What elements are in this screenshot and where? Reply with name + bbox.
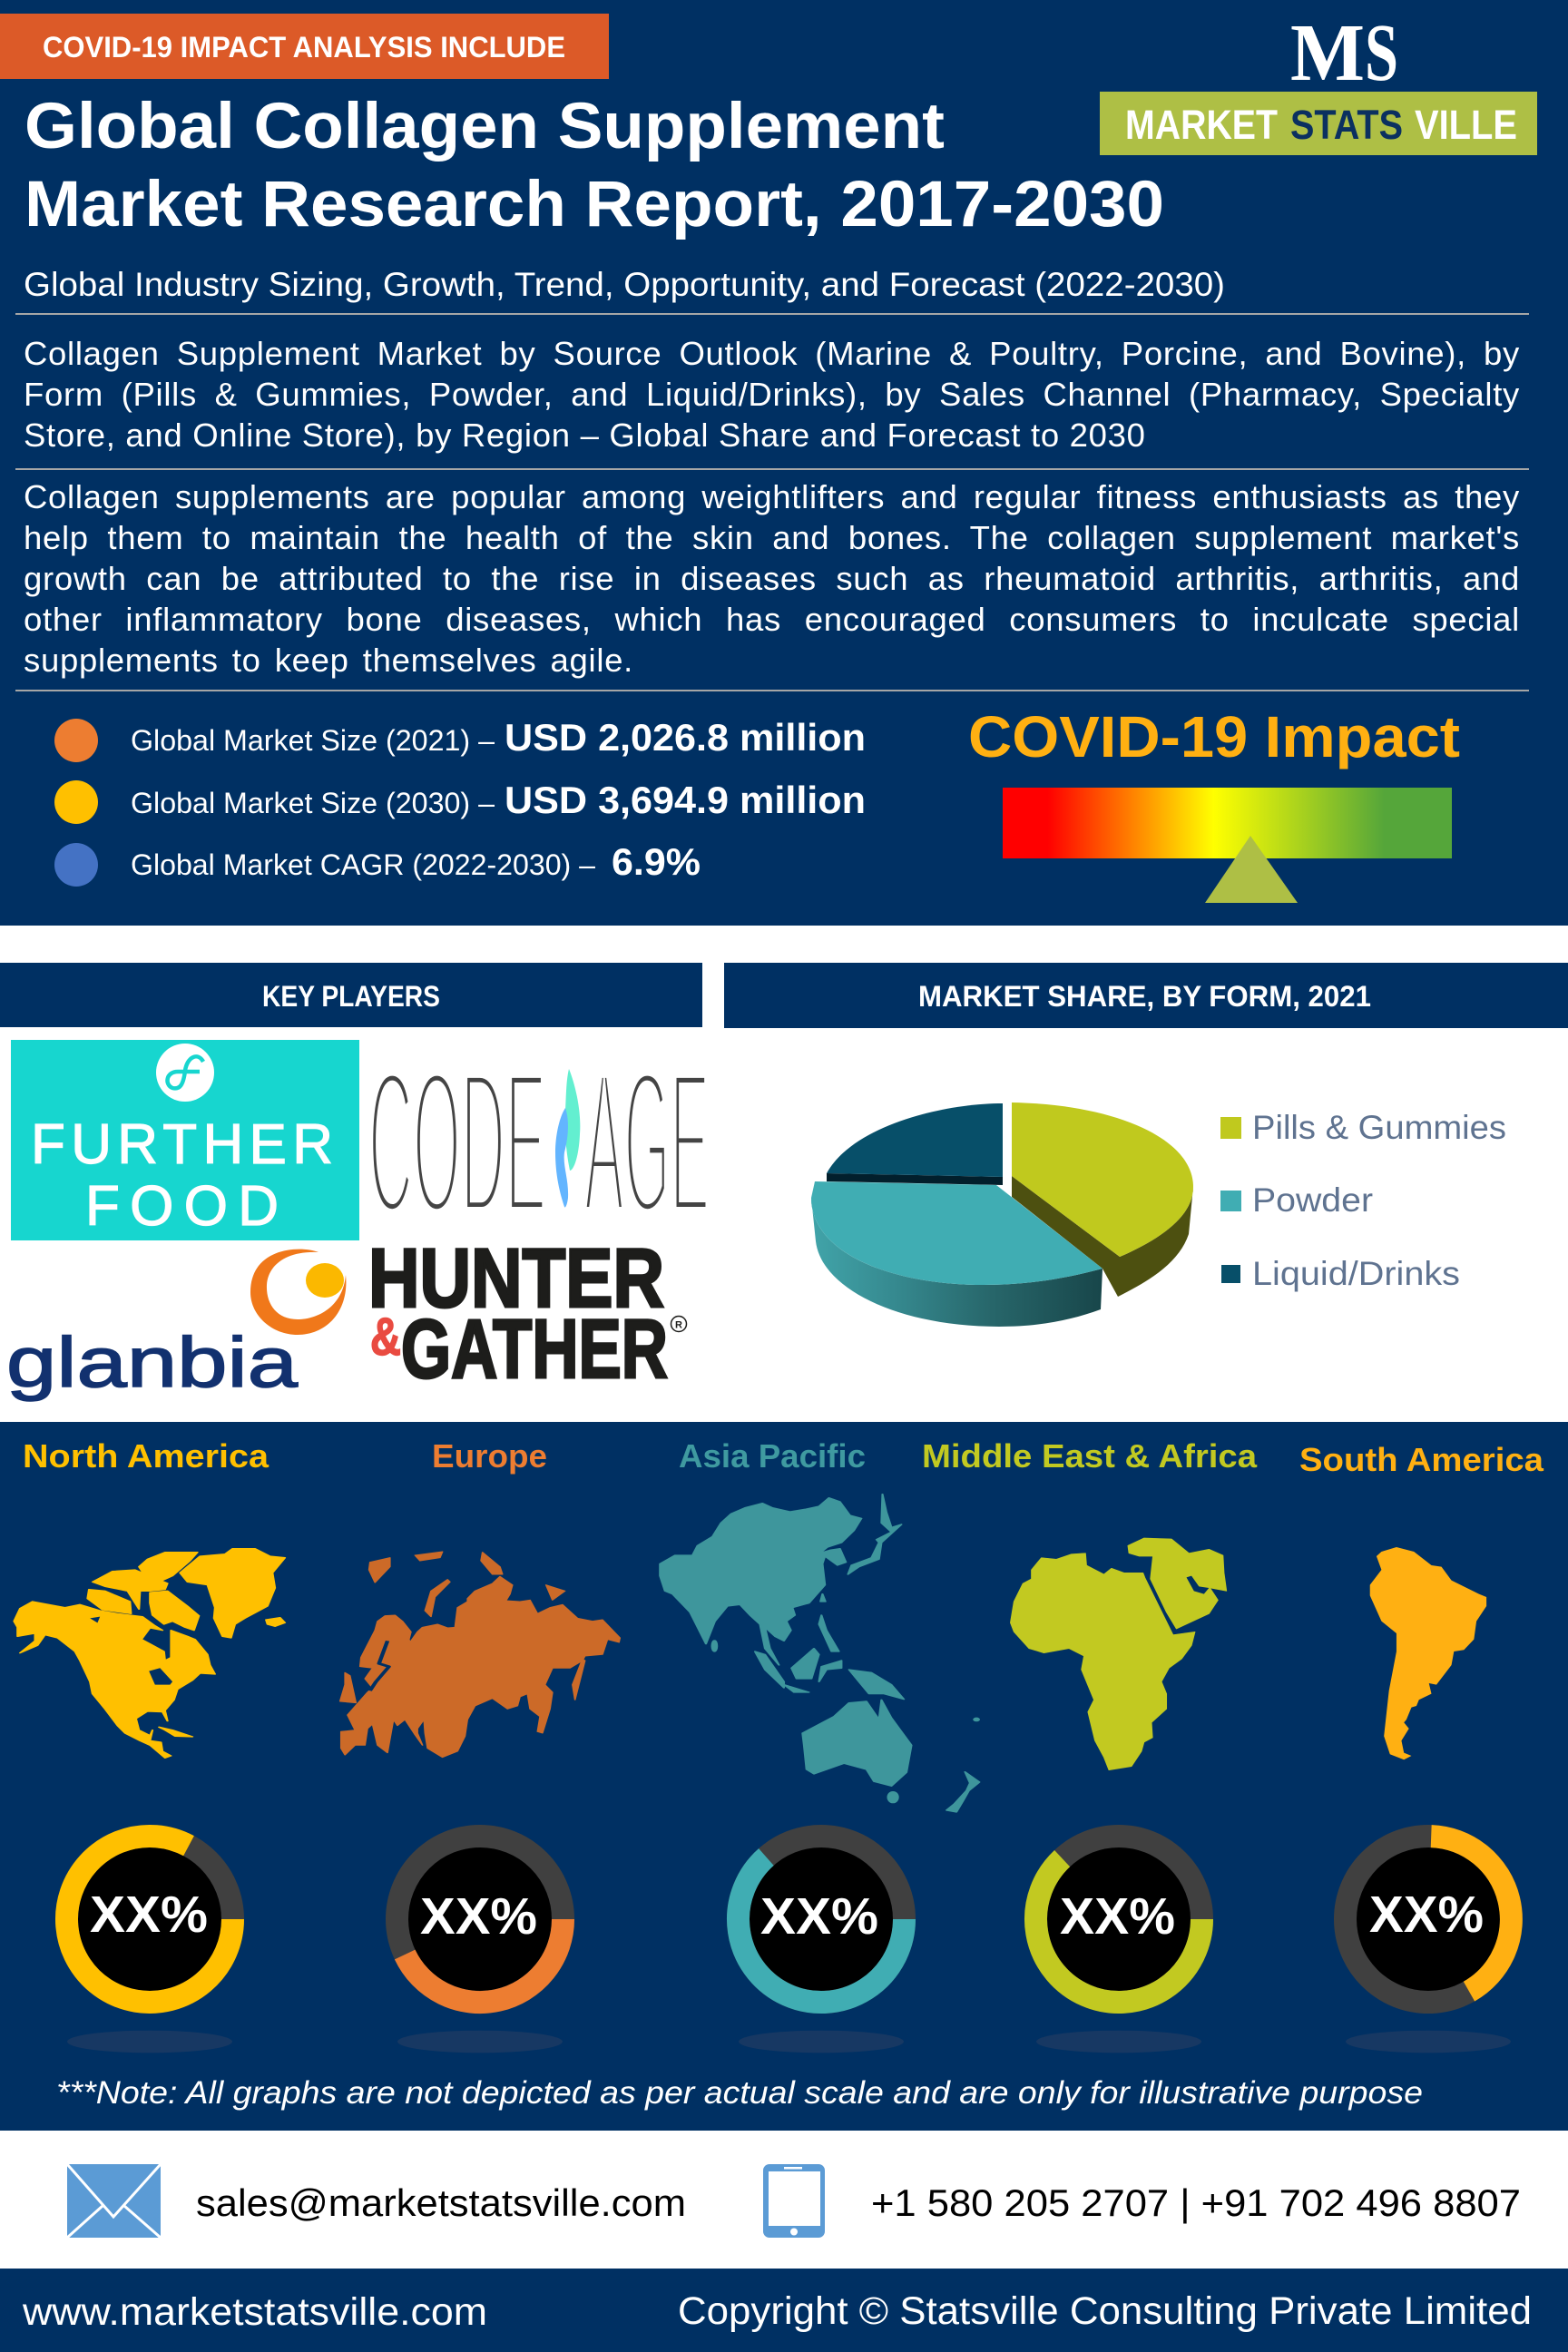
donut: south america <box>1345 1837 1512 2053</box>
stat: market CAGR: 6.9% <box>612 840 701 883</box>
regions navy panel <box>0 1422 1568 2131</box>
text block: market overview: growth can be attributed to the rise in diseases such as rheumatoid arthritis, arthritis, and <box>24 560 1520 597</box>
footer navy panel <box>0 2269 1568 2352</box>
covid-19 impact gauge: COVID-19 Impact <box>968 704 1460 769</box>
logo: hunter and gather <box>368 1232 686 1396</box>
stat: market size 2021: USD 2,026.8 million <box>505 716 866 759</box>
donut: north america: XX% <box>90 1886 208 1944</box>
logo: hunter and gather: R <box>675 1319 682 1330</box>
logo: glanbia: glanbia <box>6 1322 299 1402</box>
logo: further food <box>11 1040 359 1240</box>
logo: market stats ville: S <box>1365 8 1398 98</box>
title <box>24 91 1164 240</box>
pie chart: market share by form <box>811 1102 1193 1327</box>
region headings: North America <box>23 1437 270 1475</box>
logo: market stats ville: VILLE <box>1415 102 1517 148</box>
logo: hunter and gather: & <box>370 1308 401 1367</box>
stat: market size 2030: Global Market Size (2030) – <box>131 787 495 819</box>
logo: further food: FOOD <box>85 1175 283 1238</box>
donut: middle east and africa <box>1036 1837 1201 2053</box>
map: middle east and africa <box>1011 1538 1227 1770</box>
text block: report scope: Form (Pills & Gummies, Powder, and Liquid/Drinks), by Sales Channel (Pharmacy, Specialty <box>24 376 1520 413</box>
logo: market stats ville: STATS <box>1290 102 1403 148</box>
banner: covid-19 impact analysis <box>0 14 609 79</box>
text block: market overview: Collagen supplements are popular among weightlifters and regular fitness enthusiasts as they <box>24 478 1520 515</box>
donut: north america <box>67 1836 232 2053</box>
icon: email envelope <box>67 2164 161 2238</box>
region headings <box>23 1437 1544 1478</box>
logo: codeage: CODE <box>368 1029 546 1256</box>
logo: glanbia <box>6 1250 346 1402</box>
text block: report scope: Collagen Supplement Market by Source Outlook (Marine & Poultry, Porcine, and Bovine), by <box>24 335 1520 372</box>
donut: middle east and africa: XX% <box>1060 1887 1175 1945</box>
stat: market CAGR <box>54 840 701 887</box>
map: south america <box>1370 1547 1486 1759</box>
donut: south america: XX% <box>1369 1886 1484 1944</box>
text block: market overview <box>24 478 1520 679</box>
heading: market share by form: MARKET SHARE, BY FORM, 2021 <box>918 980 1371 1013</box>
region headings: Middle East & Africa <box>922 1437 1258 1475</box>
subtitle: Global Industry Sizing, Growth, Trend, Opportunity, and Forecast (2022-2030) <box>24 266 1225 303</box>
contact phone numbers: +1 580 205 2707 | +91 702 496 8807 <box>871 2181 1521 2224</box>
pie legend: Liquid/Drinks <box>1252 1255 1460 1292</box>
pie legend: Pills & Gummies <box>1252 1109 1506 1146</box>
heading: key players <box>0 963 702 1027</box>
text block: report scope: Store, and Online Store), by Region – Global Share and Forecast to 2030 <box>24 416 1146 454</box>
title: Market Research Report, 2017-2030 <box>24 169 1164 240</box>
slice: powder <box>811 1181 1102 1327</box>
logo: market stats ville: MARKET <box>1125 102 1278 148</box>
slice: liquid/drinks <box>827 1103 1003 1185</box>
map: asia pacific <box>660 1494 979 1812</box>
market stats list <box>54 716 866 887</box>
heading: key players: KEY PLAYERS <box>262 980 440 1013</box>
logo: hunter and gather: GATHER <box>401 1303 668 1396</box>
contact email: sales@marketstatsville.com <box>196 2181 686 2224</box>
stat: market size 2021 <box>54 716 866 762</box>
pie legend <box>1220 1109 1506 1292</box>
covid-19 impact gauge <box>968 704 1460 903</box>
footer copyright: Copyright © Statsville Consulting Private Limited <box>678 2289 1532 2333</box>
region headings: Europe <box>432 1437 547 1475</box>
donut: europe <box>397 1837 563 2053</box>
logo: further food: FURTHER <box>31 1113 338 1176</box>
logo: market stats ville <box>1100 8 1537 155</box>
region headings: Asia Pacific <box>679 1437 866 1475</box>
stat: market size 2030: USD 3,694.9 million <box>505 779 866 821</box>
title: Global Collagen Supplement <box>24 91 945 162</box>
logo: market stats ville: M <box>1290 8 1365 98</box>
footnote: ***Note: All graphs are not depicted as per actual scale and are only for illustrative purpose <box>56 2075 1423 2111</box>
infographic canvas: AGE <box>584 1029 710 1256</box>
logo: codeage <box>368 1029 710 1256</box>
slice: pills and gummies <box>1012 1102 1193 1297</box>
banner: covid-19 impact analysis: COVID-19 IMPACT ANALYSIS INCLUDE <box>43 31 565 64</box>
text block: market overview: supplements to keep themselves agile. <box>24 642 633 679</box>
stat: market CAGR: Global Market CAGR (2022-2030) – <box>131 848 595 881</box>
text block: market overview: help them to maintain the health of the skin and bones. The collagen supplement market's <box>24 519 1520 556</box>
text block: market overview: other inflammatory bone diseases, which has encouraged consumers to inculcate special <box>24 601 1520 638</box>
text block: report scope <box>24 335 1520 454</box>
icon: phone <box>763 2164 825 2238</box>
region headings: South America <box>1299 1441 1544 1478</box>
donut: asia pacific <box>739 1837 904 2053</box>
donut: asia pacific: XX% <box>760 1887 878 1945</box>
map: north america <box>14 1549 285 1758</box>
logo: hunter and gather: HUNTER <box>368 1232 664 1325</box>
donut: europe: XX% <box>420 1887 537 1945</box>
stat: market size 2021: Global Market Size (2021) – <box>131 724 495 757</box>
stat: market size 2030 <box>54 779 866 824</box>
top navy panel <box>0 0 1568 926</box>
map: europe <box>340 1552 620 1758</box>
footer website: www.marketstatsville.com <box>22 2290 487 2334</box>
pie legend: Powder <box>1252 1181 1373 1219</box>
heading: market share by form <box>724 963 1568 1028</box>
